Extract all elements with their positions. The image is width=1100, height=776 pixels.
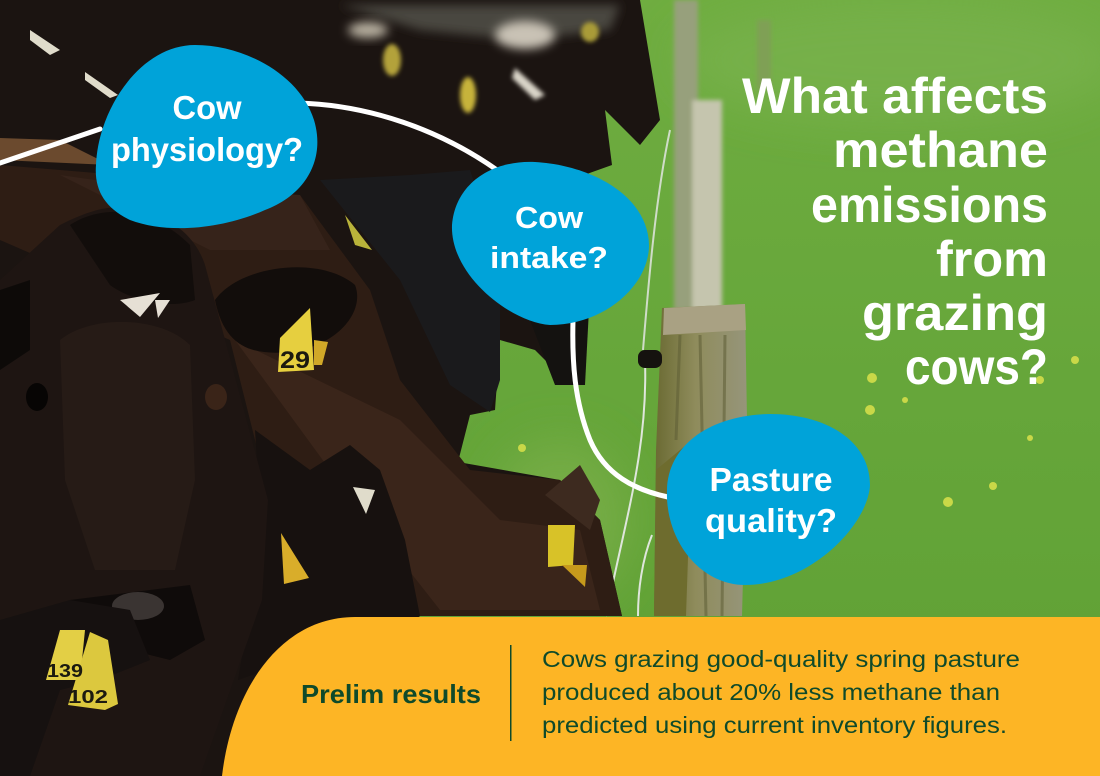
title: from — [936, 231, 1048, 287]
results description: produced about 20% less methane than — [542, 679, 1000, 705]
results description — [542, 646, 1020, 738]
photo: herd of cows — [0, 0, 660, 776]
photo: fence post and wires — [606, 130, 747, 616]
ear tag numbers: 139 — [47, 661, 83, 681]
ear tag numbers: 29 — [280, 347, 310, 374]
ear tag numbers: 102 — [68, 687, 108, 707]
ear tag numbers — [47, 347, 310, 707]
callout: cow intake — [452, 162, 649, 325]
callout: cow physiology: Cow — [172, 89, 242, 126]
photo: distant fence posts — [674, 0, 771, 310]
callout: cow physiology: physiology? — [111, 131, 303, 168]
connecting curve line — [0, 103, 668, 497]
callout: cow physiology — [96, 45, 317, 228]
callout: pasture quality: quality? — [705, 502, 837, 539]
title: grazing — [862, 285, 1048, 341]
prelim results label: Prelim results — [301, 679, 481, 709]
title: cows? — [905, 339, 1048, 395]
title: emissions — [811, 177, 1048, 233]
callout: pasture quality: Pasture — [710, 461, 832, 498]
title: methane — [833, 122, 1048, 178]
title: What affects — [742, 68, 1048, 124]
callout: pasture quality — [667, 414, 870, 585]
title — [742, 68, 1048, 395]
results banner — [222, 617, 1100, 776]
results description: predicted using current inventory figures. — [542, 712, 1007, 738]
callout: cow intake: Cow — [515, 200, 584, 235]
callout: cow intake: intake? — [490, 240, 608, 275]
results description: Cows grazing good-quality spring pasture — [542, 646, 1020, 672]
